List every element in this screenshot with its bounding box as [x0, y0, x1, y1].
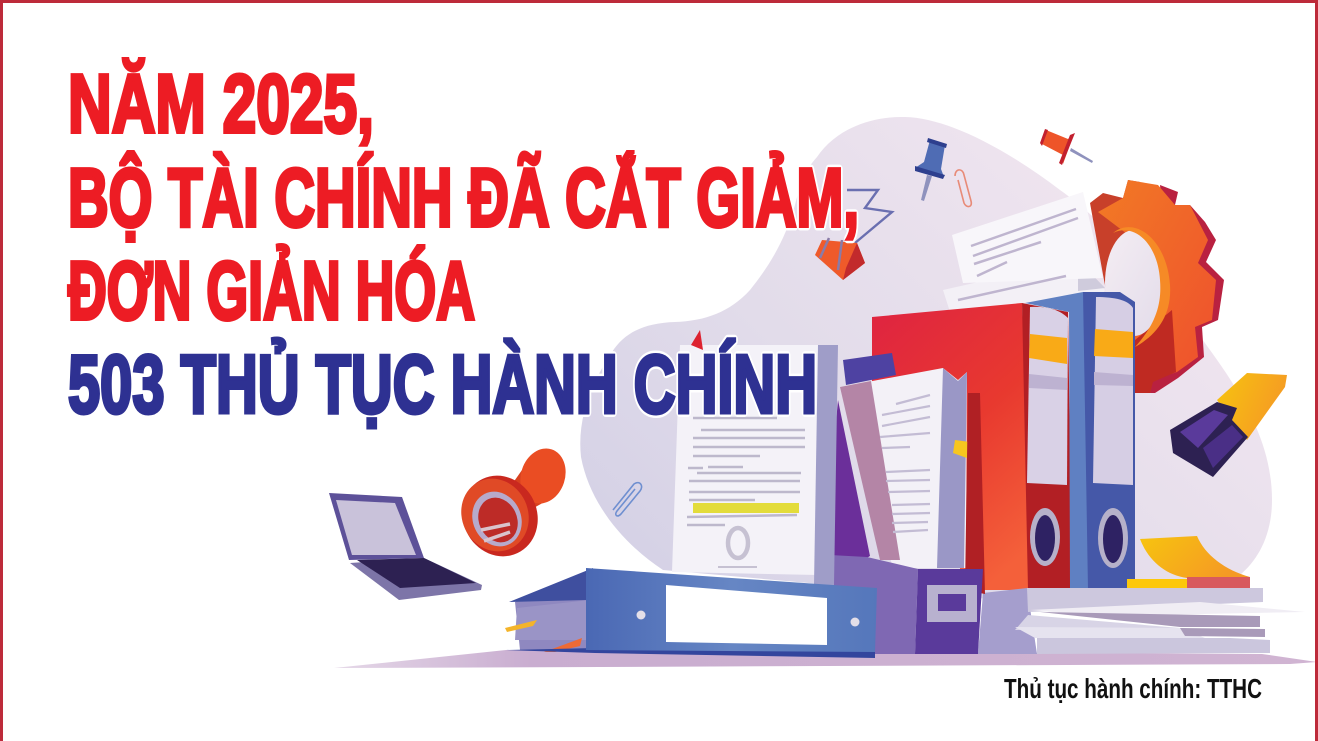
icon: ink pad: [329, 493, 482, 600]
title line 2: BỘ TÀI CHÍNH ĐÃ CẮT GIẢM,: [68, 150, 859, 244]
panel: magazine box with pages: [822, 353, 985, 654]
icon: rubber stamp: [449, 443, 573, 569]
icon: paper clip: [955, 170, 971, 207]
panel: document with seal: [672, 330, 838, 585]
title line 1: NĂM 2025,: [68, 57, 374, 150]
title line 2: BỘ TÀI CHÍNH ĐÃ CẮT GIẢM,: [68, 150, 859, 244]
title line 2: [68, 150, 859, 244]
panel: blue binder: [1025, 292, 1135, 590]
panel: blue lying folder: [505, 568, 877, 658]
icon: loose paper sheets: [943, 192, 1105, 312]
icon: sticky notes: [1127, 536, 1250, 588]
title line 4: [68, 338, 817, 430]
icon: highlighter: [1170, 373, 1287, 477]
title line 4: 503 THỦ TỤC HÀNH CHÍNH: [68, 338, 817, 430]
title line 4: 503 THỦ TỤC HÀNH CHÍNH: [68, 338, 817, 430]
icon: blue push pin: [915, 138, 947, 201]
icon: paper stack: [978, 588, 1305, 654]
icon: gear: [1090, 180, 1224, 395]
title: [68, 57, 859, 430]
panel: red binder: [872, 303, 1072, 590]
icon: blue clip on blob: [613, 483, 642, 516]
icon: floor shadow: [334, 650, 1317, 668]
icon: binder clip: [815, 190, 892, 280]
icon: red push pin: [1040, 129, 1093, 165]
background blob: [580, 117, 1272, 600]
title line 3: ĐƠN GIẢN HÓA: [68, 243, 475, 337]
